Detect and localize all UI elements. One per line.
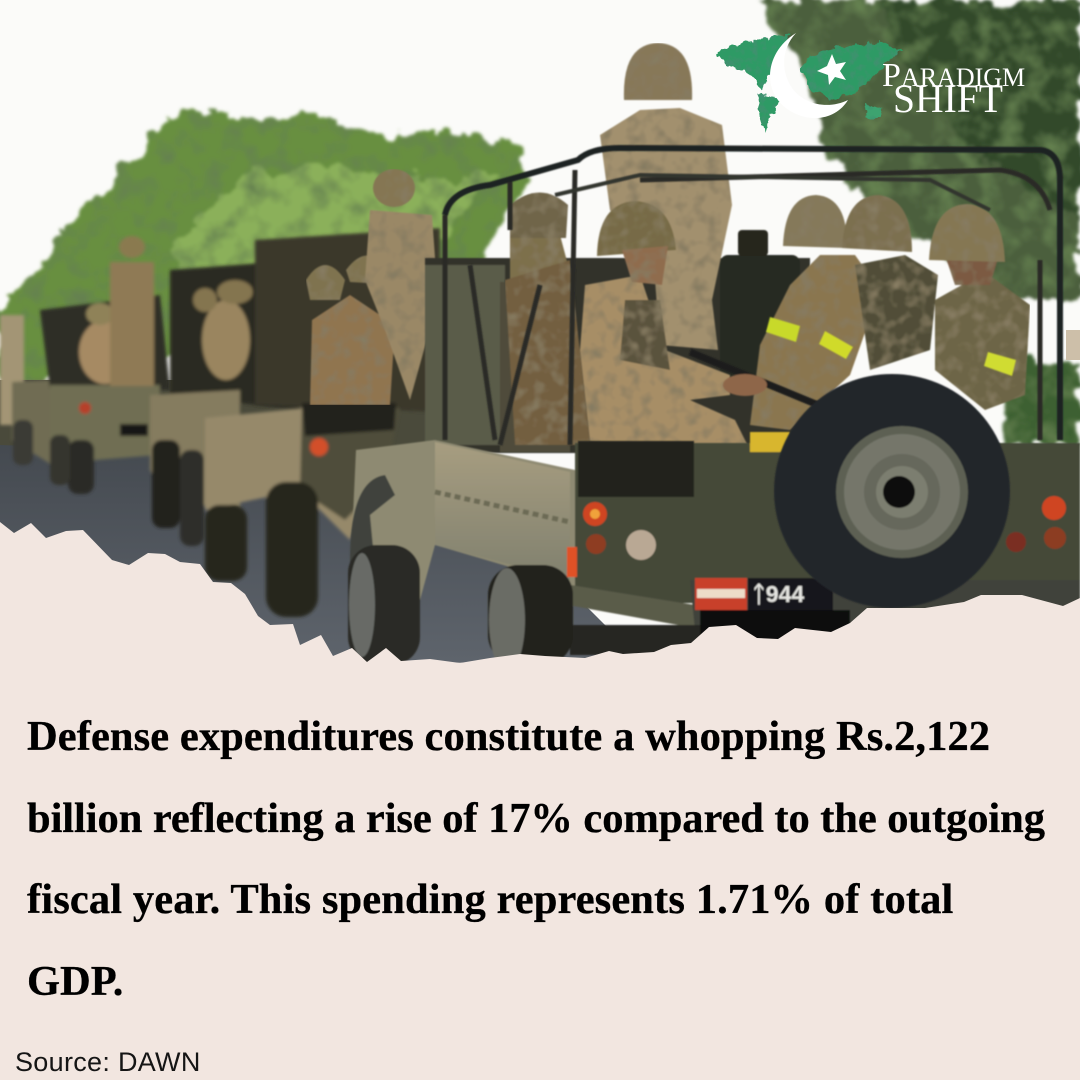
main statement text [27, 713, 1045, 1005]
main statement text: fiscal year. This spending represents 1.71% of total [27, 876, 953, 923]
second vehicle [205, 228, 440, 617]
logo world map [714, 35, 902, 133]
road [0, 400, 640, 670]
logo: Paradigm Shift: SHIFT [893, 76, 1003, 121]
background trees [0, 0, 1080, 445]
spare wheel [774, 374, 1010, 608]
roll cage rails [445, 148, 1060, 445]
main statement text: billion reflecting a rise of 17% compared to the outgoing [27, 795, 1045, 842]
standing and seated soldiers [505, 43, 1030, 450]
sky [0, 0, 1080, 660]
logo star [817, 54, 846, 85]
logo wordmark: PARADIGM [882, 57, 1025, 94]
third vehicle [150, 260, 300, 546]
main statement text: Defense expenditures constitute a whopping Rs.2,122 [27, 713, 990, 760]
distant pale background on right edge [1066, 330, 1080, 360]
lead vehicle body [348, 432, 1080, 672]
mid convoy soldiers [306, 169, 438, 405]
lead vehicle canopy and cab [425, 230, 810, 453]
main statement text: GDP. [27, 958, 123, 1005]
source credit: Source: DAWN [15, 1047, 201, 1077]
logo: Paradigm Shift [714, 33, 1025, 133]
arm bands, rifle and hand [690, 317, 1016, 412]
lead vehicle body: ᛏ944 [752, 581, 804, 607]
logo crescent [770, 33, 848, 118]
far vehicles [0, 236, 170, 494]
dark ground behind convoy [0, 380, 440, 470]
torn paper panel [0, 522, 1080, 1080]
